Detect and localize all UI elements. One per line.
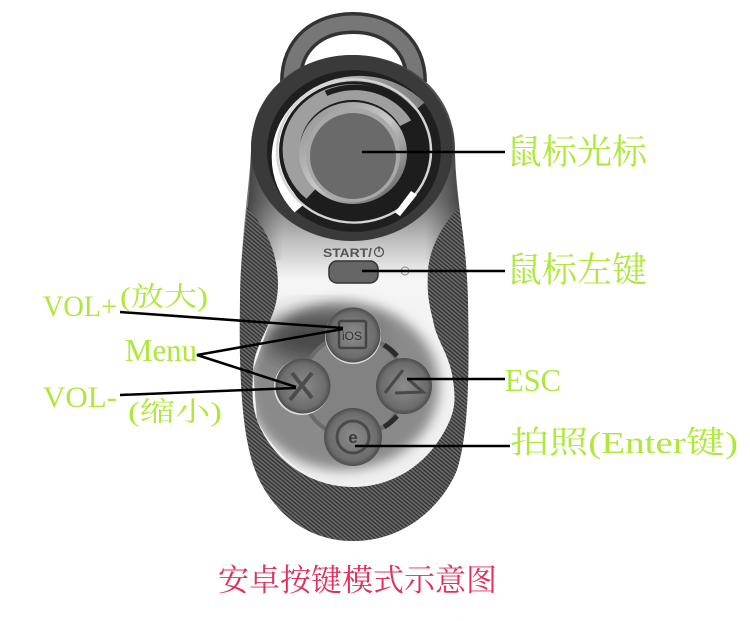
light ring band: [278, 81, 420, 209]
white accent: [395, 191, 417, 216]
title: 安卓按键模式示意图: [218, 563, 497, 598]
well shadow: [263, 314, 373, 362]
label: Menu: Menu: [125, 332, 197, 368]
d-pad ring: [302, 335, 404, 437]
joystick rings (slightly foreshortened): [267, 70, 441, 232]
button: X: [274, 358, 330, 415]
button: triangle: [376, 358, 432, 414]
indicator light: [401, 267, 409, 275]
label: VOL-: VOL-: [43, 381, 117, 414]
label: mouse cursor: 鼠标光标: [507, 133, 648, 172]
label: photo / enter: 拍照(Enter键): [510, 425, 738, 460]
d-pad dark arcs: [384, 345, 397, 427]
button well: [247, 302, 439, 470]
label: zoom in: (放大): [120, 282, 208, 312]
joystick cap: [310, 113, 396, 199]
device: [240, 23, 469, 541]
start button: [329, 261, 378, 283]
grey crescent: [291, 92, 408, 193]
strap loop: [291, 23, 416, 82]
joystick collar: [299, 102, 407, 204]
button: iOS: [325, 308, 381, 364]
dark arc over crescent: [326, 87, 414, 119]
label: zoom out: (缩小): [128, 397, 222, 427]
thin rim line: [277, 79, 431, 223]
grips: [240, 207, 469, 541]
label: VOL+: VOL+: [43, 290, 117, 323]
dark inner field: [267, 70, 441, 232]
label: mouse left button: 鼠标左键: [507, 251, 647, 290]
start label: START/: [323, 248, 373, 260]
start label: [323, 246, 384, 260]
button: iOS: iOS: [342, 329, 362, 343]
device body: [240, 55, 469, 541]
label: ESC: ESC: [505, 362, 561, 398]
joystick head: dark outer ring: [251, 55, 453, 241]
button: e: [324, 408, 382, 466]
button: e: e: [348, 428, 358, 447]
inner dark ring: [279, 81, 429, 221]
leader lines: [120, 152, 510, 446]
side shading: [243, 55, 465, 260]
